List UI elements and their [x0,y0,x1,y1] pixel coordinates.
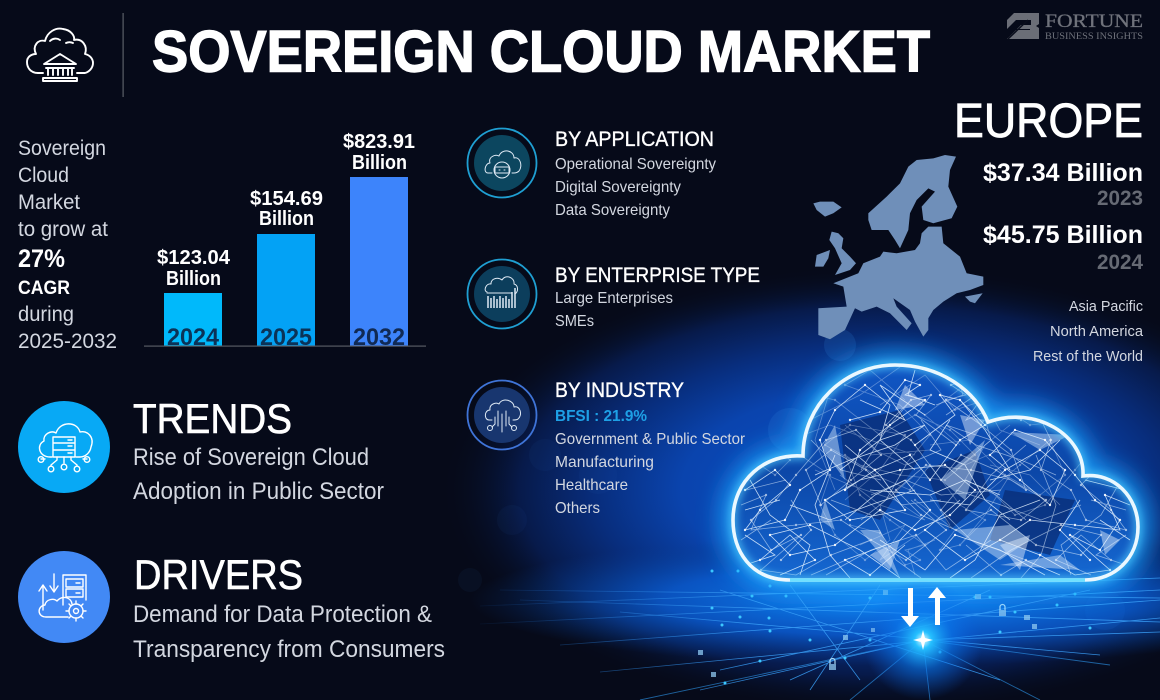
panel: by enterprise type: BY ENTERPRISE TYPE [555,264,760,287]
icon: cloud with bar chart [468,260,536,328]
panel: by enterprise type: SMEs [555,313,594,330]
bar 2025: 2025 [260,324,312,351]
panel: drivers: Demand for Data Protection & [133,601,432,628]
panel: Europe stats: $37.34 Billion [983,159,1143,187]
panel: Europe stats: Asia Pacific [1069,299,1143,315]
CAGR text block: 27% [18,245,65,273]
panel: drivers: Transparency from Consumers [133,636,445,663]
CAGR text block: to grow at [18,218,108,241]
CAGR text block: Sovereign [18,137,106,160]
panel: trends [18,395,384,505]
panel: trends: Adoption in Public Sector [133,478,384,505]
panel: drivers: DRIVERS [134,551,303,598]
header divider [122,13,124,97]
CAGR text block: Cloud [18,164,69,187]
data arrows and star [860,580,986,700]
bar 2032 [343,131,415,351]
panel: by industry: Others [555,500,600,517]
panel: Europe stats: 2023 [1097,187,1143,210]
bar 2025: $154.69 [250,188,323,210]
title: SOVEREIGN CLOUD MARKET [152,20,930,84]
CAGR text block: Market [18,191,80,214]
panel: Europe stats: North America [1050,324,1144,340]
icon: server, arrows and gear [18,551,110,643]
panel: by industry: Healthcare [555,477,628,494]
bar 2024: Billion [166,268,221,290]
panel: Europe stats: Rest of the World [1033,349,1143,365]
panel: by application: BY APPLICATION [555,128,714,151]
panel: by application: Digital Sovereignty [555,179,681,196]
logo: Fortune Business Insights [1007,11,1143,42]
CAGR text block: during [18,303,74,326]
icon: cloud with chip [468,128,536,198]
CAGR text block [18,137,117,353]
floor grid with locks [470,534,1160,700]
panel: by industry [468,379,746,517]
icon: cloud with government building [27,29,93,81]
icon: server cloud [18,401,110,493]
panel: trends: Rise of Sovereign Cloud [133,444,369,471]
panel: by industry: Manufacturing [555,454,654,471]
panel: Europe stats: EUROPE [954,95,1143,148]
panel: Europe stats: $45.75 Billion [983,221,1143,249]
panel: by industry: BFSI : 21.9% [555,408,647,425]
bar 2032: Billion [352,152,407,174]
map: Europe [813,155,983,339]
panel: by enterprise type: Large Enterprises [555,290,673,307]
bar 2024 [157,247,231,351]
panel: by application: Data Sovereignty [555,202,670,219]
panel: by enterprise type [468,260,760,330]
panel: by application [468,128,716,219]
bar chart [144,131,426,351]
CAGR text block: 2025-2032 [18,330,117,353]
bar 2025 [250,188,323,351]
bar 2032: 2032 [353,324,405,351]
CAGR text block: CAGR [18,278,70,299]
panel: by industry: BY INDUSTRY [555,379,684,402]
logo: Fortune Business Insights: FORTUNE [1045,11,1143,32]
panel: Europe stats: 2024 [1097,251,1143,274]
bar 2024: $123.04 [157,247,231,269]
bar 2024: 2024 [167,324,220,351]
panel: trends: TRENDS [133,395,292,442]
panel: by industry: Government & Public Sector [555,431,746,448]
panel: Europe stats [954,95,1144,365]
bar 2025: Billion [259,208,314,230]
panel: drivers [18,551,445,663]
bar 2032: $823.91 [343,131,415,153]
logo: Fortune Business Insights: BUSINESS INSIGHTS [1045,32,1143,42]
panel: by application: Operational Sovereignty [555,156,716,173]
main cloud with network [733,365,1138,580]
icon: cloud with connectors [468,380,536,450]
